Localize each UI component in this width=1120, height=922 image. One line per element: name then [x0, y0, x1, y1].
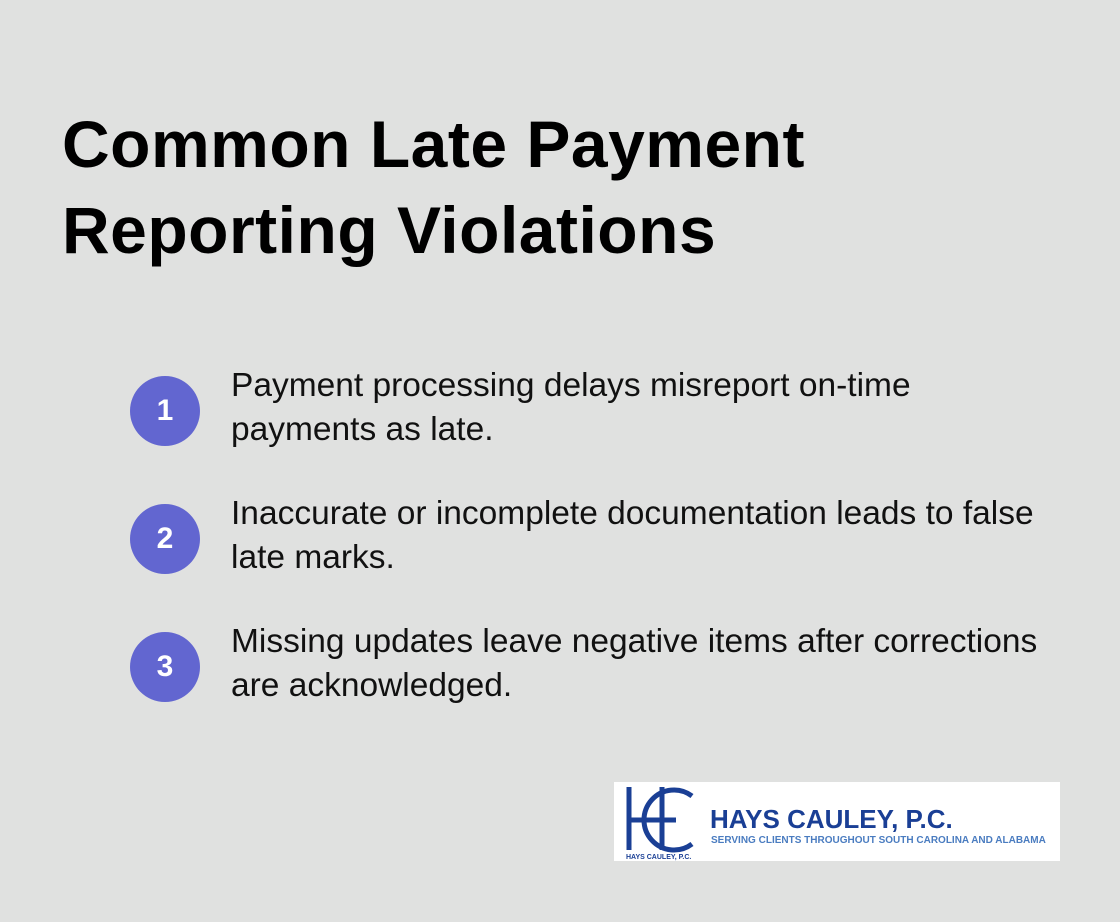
text 1: Payment processing delays misreport on-time — [231, 367, 911, 404]
icon: number 3 — [130, 632, 200, 702]
item 3 — [130, 623, 1037, 704]
icon: number 2: 2 — [157, 522, 173, 555]
icon: number 1: 1 — [157, 394, 173, 427]
text 2: Inaccurate or incomplete documentation leads to false — [231, 495, 1034, 532]
logo text: SERVING CLIENTS THROUGHOUT SOUTH CAROLINA AND ALABAMA — [711, 835, 1046, 846]
text 1: payments as late. — [231, 411, 494, 448]
text 3: Missing updates leave negative items after corrections — [231, 623, 1037, 660]
logo text: HAYS CAULEY, P.C. — [626, 854, 691, 861]
logo mark — [629, 787, 692, 850]
item 1 — [130, 367, 911, 448]
text 3: are acknowledged. — [231, 667, 512, 704]
text 1 — [231, 367, 911, 448]
icon: number 2 — [130, 504, 200, 574]
item 2 — [130, 495, 1034, 576]
title — [62, 107, 805, 267]
text 3 — [231, 623, 1037, 704]
logo — [614, 782, 1060, 861]
title: Common Late Payment — [62, 107, 805, 181]
logo text — [626, 804, 1046, 861]
logo text: HAYS CAULEY, P.C. — [710, 804, 953, 834]
text 2: late marks. — [231, 539, 395, 576]
icon: number 1 — [130, 376, 200, 446]
title: Reporting Violations — [62, 193, 716, 267]
icon: number 3: 3 — [157, 650, 173, 683]
text 2 — [231, 495, 1034, 576]
